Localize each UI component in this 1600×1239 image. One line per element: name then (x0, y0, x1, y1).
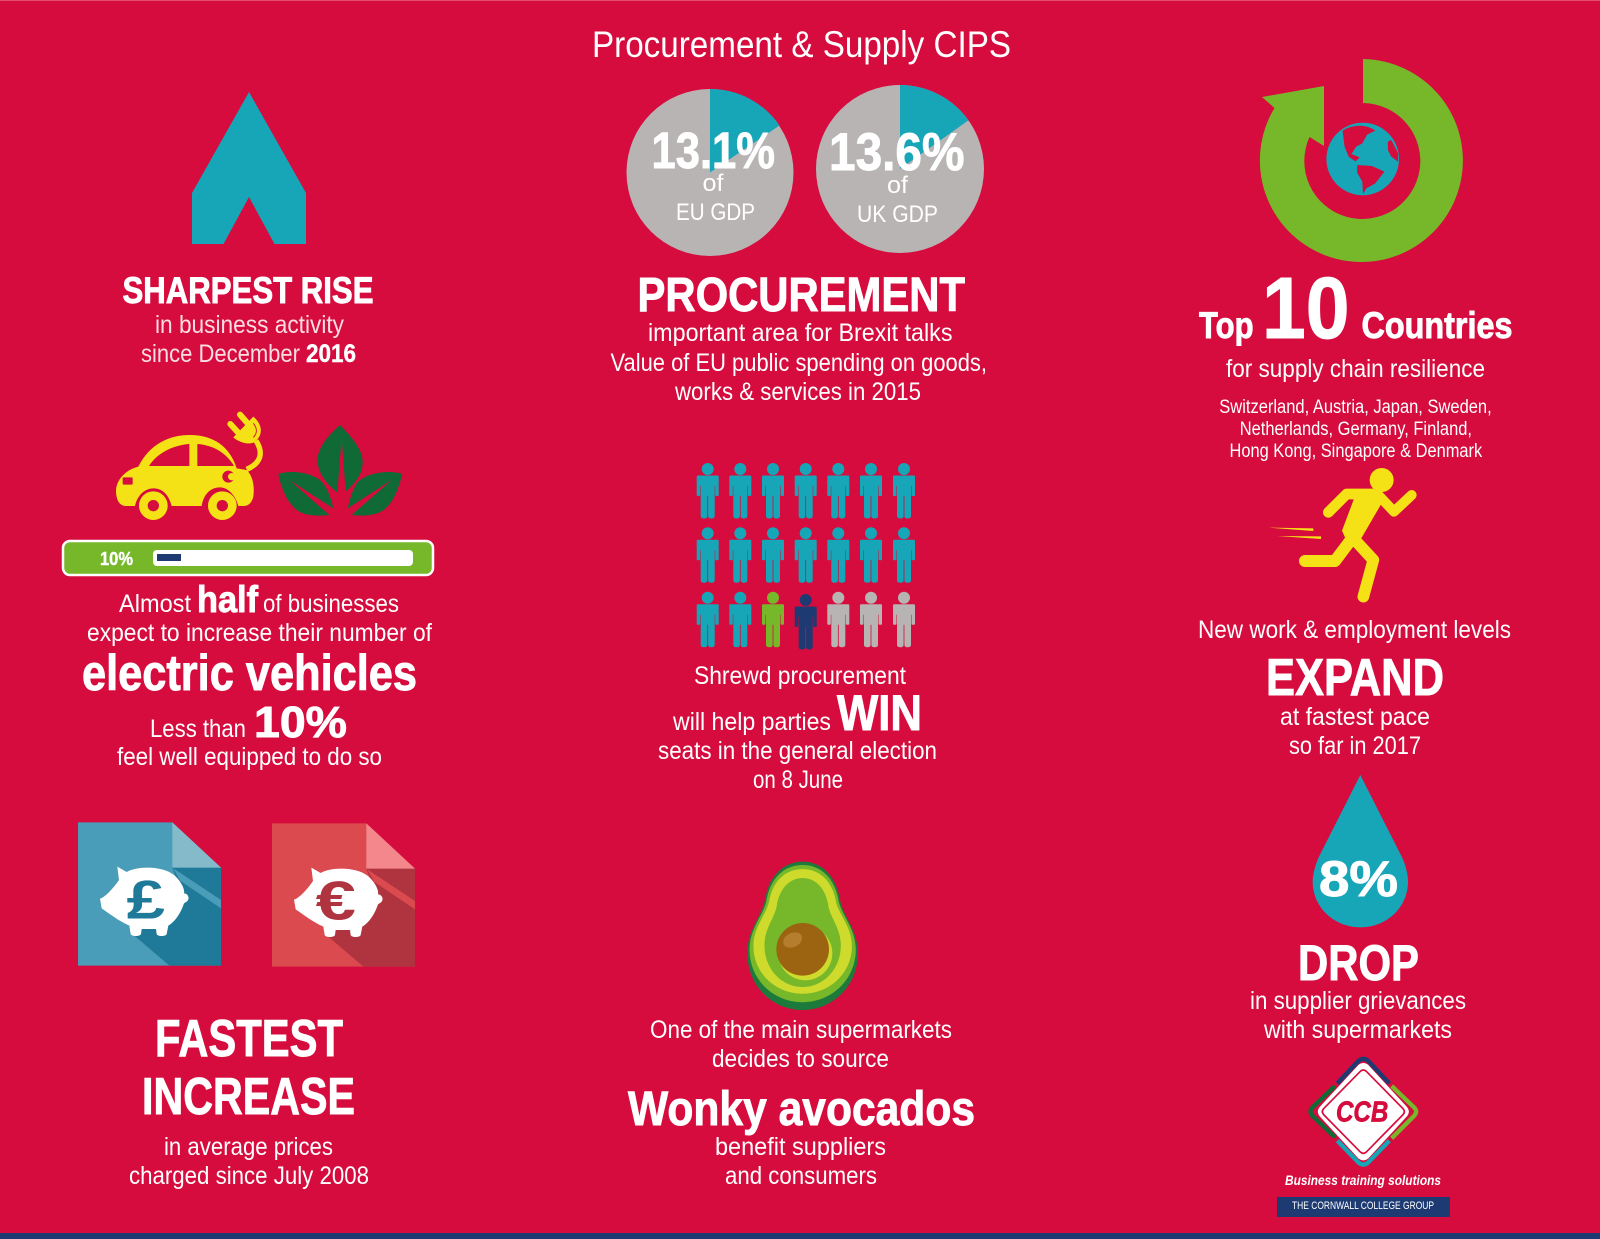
text: expect to increase: expect to increase their number of (87, 619, 432, 647)
text: feel well equipped: feel well equipped to do so (117, 743, 382, 771)
heading: fastest: FASTEST (155, 1010, 343, 1068)
text: list of countries: Switzerland, Austria, Japan, Sweden, (1219, 397, 1492, 418)
heading: expand: EXPAND (1266, 649, 1444, 707)
text: supply chain resilience: for supply chain resilience (1226, 355, 1485, 383)
text: almost half of businesses (119, 579, 399, 620)
text: will help parties WIN: WIN (837, 685, 922, 741)
heading: top 10 countries: 10 (1262, 260, 1350, 357)
heading: increase: INCREASE (142, 1068, 355, 1126)
text: less than 10%: 10% (254, 698, 347, 747)
text: list of countries: Netherlands, Germany, Finland, (1240, 419, 1472, 440)
heading: top 10 countries: Countries (1362, 305, 1512, 346)
icon: euro piggy bank document: € (316, 869, 356, 931)
pie chart: 13.6% of UK GDP (816, 85, 984, 253)
text: almost half of businesses: half (197, 579, 259, 620)
label: the cornwall college group: THE CORNWALL COLLEGE GROUP (1292, 1200, 1434, 1212)
text: seats in the general election: seats in the general election (658, 737, 937, 765)
panel: CCB logo (1277, 1059, 1450, 1217)
text: less than 10%: Less than (150, 715, 246, 743)
pie chart: 13.6% of UK GDP: of (887, 172, 908, 199)
label: the cornwall college group (1277, 1197, 1450, 1217)
heading: procurement: PROCUREMENT (638, 269, 965, 322)
text: in supplier grievances: in supplier grievances (1250, 987, 1466, 1015)
heading: electric vehicles: electric vehicles (82, 645, 417, 701)
icon: up arrow (192, 92, 306, 244)
panel: 8% drop (1250, 775, 1466, 1044)
icon: pound piggy bank document (78, 822, 221, 966)
text: new work and employment levels: New work & employment levels (1198, 616, 1511, 644)
text: one of the main supermarkets: One of the main supermarkets (650, 1016, 952, 1044)
heading: sharpest rise: SHARPEST RISE (122, 270, 374, 311)
heading: top 10 countries: Top (1199, 305, 1254, 346)
text: benefit suppliers: benefit suppliers (715, 1133, 886, 1161)
progress bar 10% (63, 541, 433, 575)
logo: CCB diamond (1310, 1059, 1416, 1164)
icon: pound piggy bank document: £ (127, 868, 166, 930)
icon: green leaves (278, 425, 402, 516)
text: on 8 June: on 8 June (753, 766, 843, 794)
icon: water drop with 8%: 8% (1319, 851, 1398, 907)
title: Procurement & Supply CIPS (592, 24, 1011, 65)
text: value of EU public spending: Value of EU public spending on goods, (610, 349, 987, 377)
pie chart: 13.1% of EU GDP: of (702, 170, 724, 197)
icon: electric car (116, 415, 261, 520)
text: almost half of businesses: of businesses (263, 590, 399, 618)
text: decides to source: decides to source (712, 1045, 889, 1073)
heading: top 10 countries (1199, 260, 1512, 357)
bottom bar (0, 1233, 1600, 1239)
panel: people and election (658, 463, 937, 794)
progress bar 10%: 10% (100, 549, 133, 569)
text: works and services: works & services in 2015 (674, 378, 921, 406)
panel: GDP and procurement (610, 85, 987, 406)
text: list of countries (1219, 397, 1492, 462)
text: so far in 2017: so far in 2017 (1289, 732, 1421, 760)
logo: CCB diamond: CCB (1336, 1097, 1388, 1129)
text: shrewd procurement: Shrewd procurement (694, 662, 906, 690)
panel: top 10 countries (1199, 59, 1512, 462)
panel: expand (1198, 468, 1511, 760)
pie chart: 13.6% of UK GDP: 13.6% (829, 123, 964, 182)
text: since December 2016: 2016 (306, 340, 356, 368)
text: with supermarkets: with supermarkets (1263, 1016, 1452, 1044)
icon: water drop with 8% (1313, 775, 1408, 927)
text: since December 2016: since December (141, 340, 300, 368)
panel: wonky avocados (628, 862, 975, 1190)
text: business training solutions: Business training solutions (1285, 1172, 1441, 1188)
pie chart: 13.1% of EU GDP: EU GDP (676, 199, 755, 226)
text: charged since July 2008: charged since July 2008 (129, 1162, 369, 1190)
heading: drop: DROP (1298, 935, 1419, 991)
text: will help parties WIN: will help parties (672, 708, 831, 736)
panel: electric vehicles (63, 415, 433, 771)
icon: avocado (747, 862, 858, 1010)
text: almost half of businesses: Almost (119, 590, 191, 618)
text: list of countries: Hong Kong, Singapore & Denmark (1230, 441, 1483, 462)
text: at fastest pace: at fastest pace (1280, 703, 1430, 731)
text: less than 10% (150, 698, 347, 747)
icon: green circular arrow (1260, 59, 1463, 262)
heading: wonky avocados: Wonky avocados (628, 1083, 975, 1136)
panel: fastest increase (78, 822, 415, 1190)
pie chart: 13.1% of EU GDP (626, 89, 794, 256)
pictogram: people grid (697, 463, 915, 650)
pie chart: 13.6% of UK GDP: UK GDP (857, 201, 938, 228)
text: in average prices: in average prices (164, 1133, 333, 1161)
text: will help parties WIN (672, 685, 922, 741)
icon: runner (1269, 468, 1412, 597)
text: brexit talks: important area for Brexit talks (648, 319, 952, 347)
text: and consumers: and consumers (725, 1162, 877, 1190)
icon: euro piggy bank document (272, 823, 415, 967)
panel: sharpest rise (122, 92, 374, 368)
icon: globe (1326, 123, 1399, 195)
pie chart: 13.1% of EU GDP: 13.1% (652, 122, 775, 179)
text: in business activity: in business activity (155, 311, 344, 339)
